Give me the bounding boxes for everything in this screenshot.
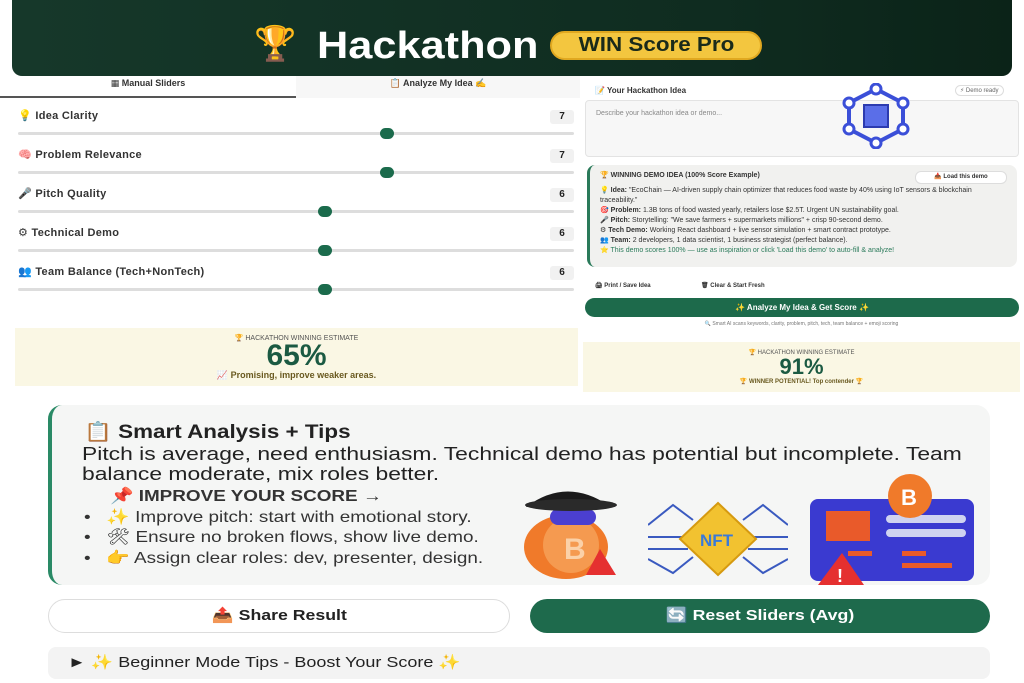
badge: WIN Score Pro	[578, 34, 734, 56]
panel: sliders: 6	[559, 189, 565, 200]
demo idea box: 👥 Team: 2 developers, 1 data scientist, 1 business strategist (perfect balance).	[600, 237, 848, 244]
tab: analyze: 📋 Analyze My Idea ✍️	[390, 78, 486, 88]
estimate 91	[583, 342, 1020, 392]
panel: estimate 65	[15, 328, 578, 386]
icon: masked coin: B	[564, 533, 586, 566]
panel: sliders: 7	[559, 111, 565, 122]
paragraph: Pitch is average, need enthusiasm. Technical demo has potential but incomplete. Team balance moderate, mix roles better.	[82, 444, 962, 484]
demo idea box: ⭐ This demo scores 100% — use as inspiration or click 'Load this demo' to auto-fill & analyze!	[600, 247, 894, 254]
estimate 91: 91%	[779, 354, 824, 379]
demo idea box: ⚙ Tech Demo: Working React dashboard + live sensor simulation + smart contract prototype.	[600, 227, 891, 234]
tips list: • 🛠 Ensure no broken flows, show live demo.	[84, 529, 479, 546]
textarea: Describe your hackathon idea or demo...	[596, 110, 722, 117]
beginner tips bar: ► ✨ Beginner Mode Tips - Boost Your Score ✨	[68, 654, 461, 671]
panel: idea input: 🔍 Smart AI scans keywords, clarity, problem, pitch, tech, team balance + emoji scoring	[705, 321, 898, 327]
button: share: 📤 Share Result	[211, 607, 347, 624]
panel: sliders: ⚙ Technical Demo	[18, 227, 119, 239]
panel: sliders: 🎤 Pitch Quality	[18, 188, 106, 200]
button: reset: 🔄 Reset Sliders (Avg)	[666, 607, 854, 624]
panel: estimate 65: 🏆 HACKATHON WINNING ESTIMATE	[235, 335, 358, 342]
tab: manual sliders	[0, 76, 296, 98]
panel: sliders: 🧠 Problem Relevance	[18, 149, 142, 161]
tips list: 📌 IMPROVE YOUR SCORE →	[110, 488, 382, 505]
heading: 📋 Smart Analysis + Tips	[84, 422, 351, 443]
tab: manual sliders: ▦ Manual Sliders	[111, 78, 185, 88]
icon: crypto dashboard: !	[837, 566, 843, 586]
panel: idea input: 🖨 Print / Save Idea	[595, 283, 651, 289]
panel: sliders: 6	[559, 267, 565, 278]
icon: crypto dashboard	[810, 474, 974, 586]
panel: sliders: 6	[559, 228, 565, 239]
analyze button: ✨ Analyze My Idea & Get Score ✨	[735, 303, 869, 312]
tab: analyze	[296, 76, 580, 98]
icon: NFT	[648, 502, 788, 576]
estimate 91: 🏆 WINNER POTENTIAL! Top contender 🏆	[740, 379, 863, 385]
panel: idea input: ⚡ Demo ready	[960, 88, 999, 94]
panel: sliders: 💡 Idea Clarity	[18, 110, 98, 122]
panel: estimate 65: 📈 Promising, improve weaker areas.	[217, 370, 376, 380]
demo idea box: 🏆 WINNING DEMO IDEA (100% Score Example)	[600, 172, 760, 179]
estimate 91: 🏆 HACKATHON WINNING ESTIMATE	[749, 350, 854, 356]
icon: blockchain box	[842, 83, 910, 149]
demo idea box: 📥 Load this demo	[934, 174, 988, 180]
panel: sliders	[18, 109, 574, 295]
icon: crypto dashboard: B	[901, 485, 917, 510]
panel: estimate 65: 65%	[266, 339, 327, 372]
tips list	[84, 486, 483, 566]
beginner tips bar	[48, 647, 990, 679]
icon: masked coin	[524, 492, 617, 579]
panel: sliders: 7	[559, 150, 565, 161]
icon: NFT: NFT	[700, 531, 734, 550]
panel: idea input: 📝 Your Hackathon Idea	[595, 86, 686, 95]
button: reset	[530, 599, 990, 633]
header	[12, 0, 1012, 76]
analyze button	[585, 298, 1019, 317]
demo idea box	[587, 165, 1017, 267]
badge	[550, 31, 762, 60]
demo idea box: 🎤 Pitch: Storytelling: "We save farmers + supermarkets millions" + crisp 90-second demo.	[600, 217, 883, 224]
panel: idea input: 🗑 Clear & Start Fresh	[701, 283, 765, 289]
tabs	[0, 78, 486, 98]
tips list: • 👉 Assign clear roles: dev, presenter, design.	[84, 550, 483, 566]
demo idea box: 🎯 Problem: 1.3B tons of food wasted yearly, retailers lose $2.5T. Urgent UN sustainability goal.	[600, 207, 899, 214]
tips list: • ✨ Improve pitch: start with emotional story.	[84, 508, 472, 526]
panel: sliders: 👥 Team Balance (Tech+NonTech)	[18, 266, 205, 278]
panel: idea input	[583, 83, 1020, 392]
icon: trophy: 🏆	[254, 25, 296, 63]
panel: smart analysis	[48, 405, 990, 585]
title: Hackathon	[317, 25, 538, 67]
button: share	[48, 599, 510, 633]
textarea	[585, 100, 1019, 157]
demo idea box: 💡 Idea: "EcoChain — AI-driven supply chain optimizer that reduces food waste by 40% using IoT sensors & blockchain traceability."	[600, 187, 972, 204]
